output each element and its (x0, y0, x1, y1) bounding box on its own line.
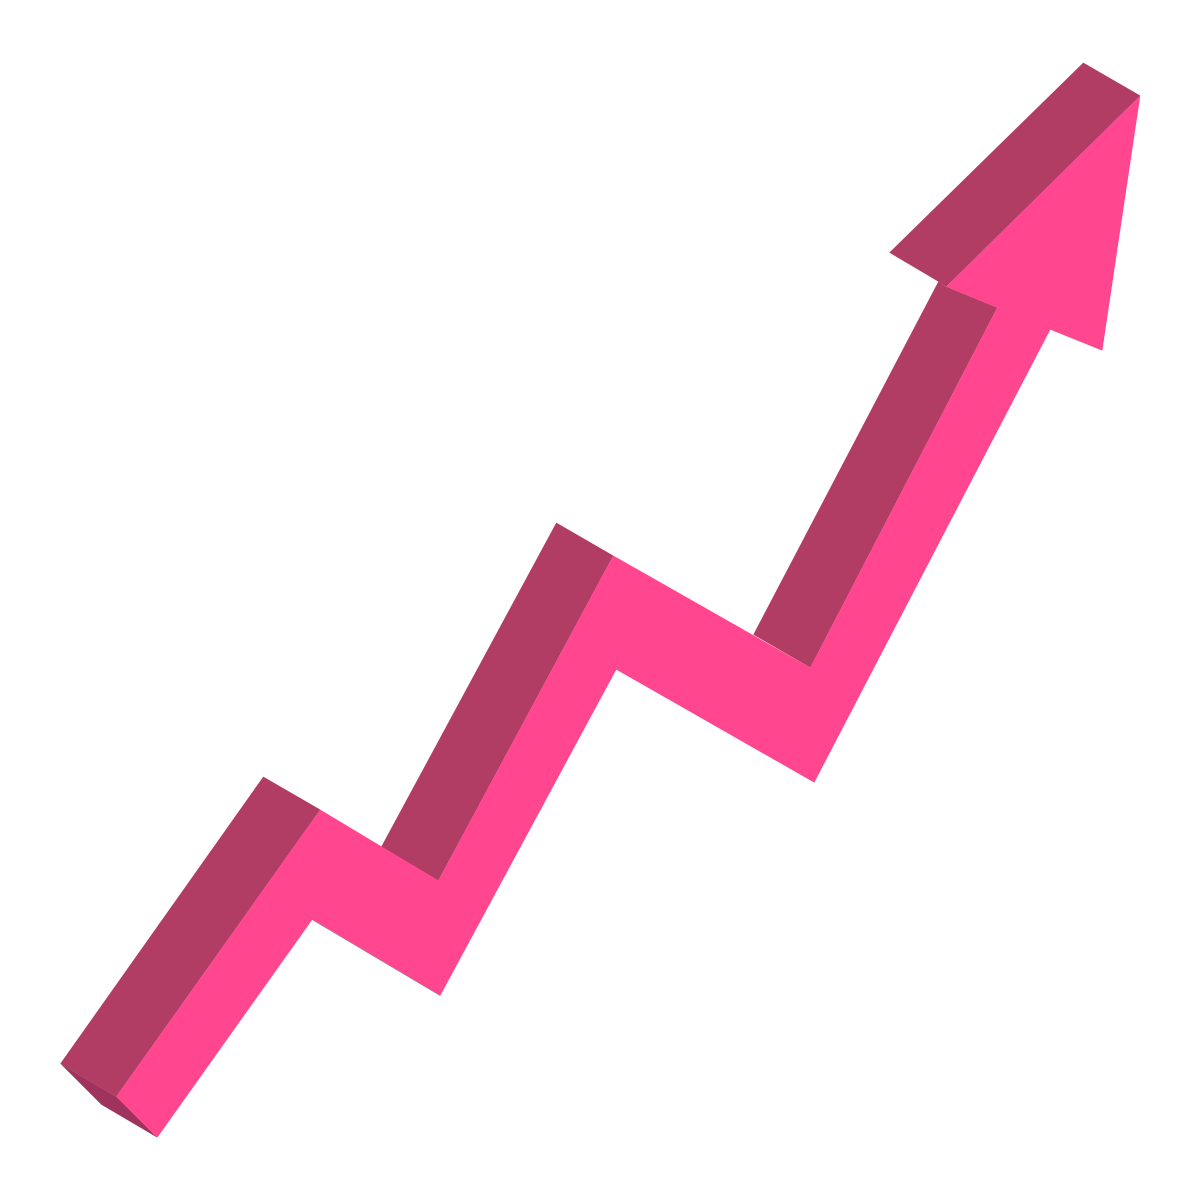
arrow front face (116, 96, 1140, 1138)
arrow notch edge (312, 920, 440, 996)
arrow side face: arrowhead (889, 63, 1140, 287)
arrow side face: second segment (381, 523, 613, 881)
arrow side face: third segment (753, 282, 997, 668)
arrow end cap (60, 1064, 157, 1138)
arrow side face: first segment (60, 777, 320, 1097)
